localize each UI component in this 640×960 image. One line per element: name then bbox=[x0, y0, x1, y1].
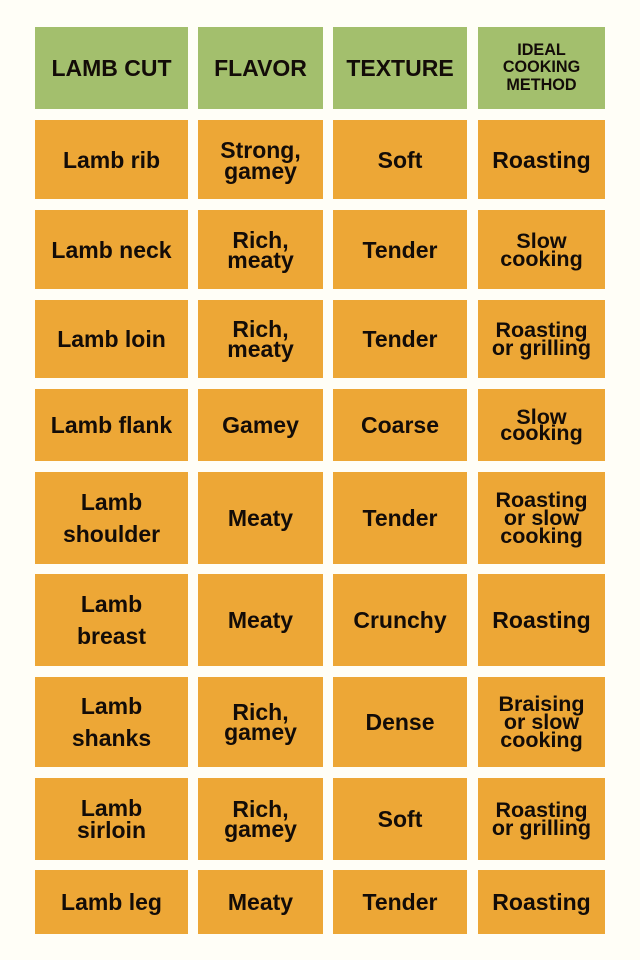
lamb shanks flavor bbox=[198, 677, 323, 767]
lamb neck flavor bbox=[198, 210, 323, 289]
lamb neck texture bbox=[333, 210, 467, 289]
row: lamb flank cut bbox=[35, 389, 188, 461]
header: lamb cut: LAMB CUT bbox=[51, 55, 172, 81]
header: ideal cooking method: COOKING bbox=[503, 58, 580, 76]
row: lamb sirloin cut: Lamb bbox=[81, 795, 142, 821]
lamb sirloin flavor: gamey bbox=[224, 816, 297, 842]
lamb loin cooking method: Roasting bbox=[496, 318, 587, 342]
lamb neck texture: Tender bbox=[362, 237, 437, 263]
lamb shoulder cooking method: or slow bbox=[504, 506, 579, 530]
lamb rib flavor bbox=[198, 120, 323, 199]
row: lamb shanks cut: Lamb bbox=[81, 693, 142, 719]
lamb rib cooking method bbox=[478, 120, 605, 199]
row: lamb shoulder cut: shoulder bbox=[63, 521, 160, 547]
header: lamb cut bbox=[35, 27, 188, 109]
lamb neck flavor: meaty bbox=[227, 247, 294, 273]
lamb shoulder cooking method bbox=[478, 472, 605, 564]
row: lamb rib cut bbox=[35, 120, 188, 199]
lamb sirloin cooking method bbox=[478, 778, 605, 860]
lamb leg flavor bbox=[198, 870, 323, 934]
lamb breast texture bbox=[333, 574, 467, 666]
lamb sirloin cooking method: or grilling bbox=[492, 816, 591, 840]
lamb shanks cooking method: or slow bbox=[504, 710, 579, 734]
lamb sirloin cooking method: Roasting bbox=[496, 798, 587, 822]
lamb shoulder flavor bbox=[198, 472, 323, 564]
row: lamb breast cut: Lamb bbox=[81, 591, 142, 617]
lamb neck cooking method: Slow bbox=[516, 229, 567, 253]
lamb rib cooking method: Roasting bbox=[492, 147, 591, 173]
row: lamb shanks cut: shanks bbox=[72, 725, 151, 751]
lamb loin texture bbox=[333, 300, 467, 378]
lamb shanks texture bbox=[333, 677, 467, 767]
lamb shoulder cooking method: cooking bbox=[500, 524, 583, 548]
row: lamb sirloin cut: sirloin bbox=[77, 817, 146, 843]
lamb rib texture bbox=[333, 120, 467, 199]
row: lamb leg cut bbox=[35, 870, 188, 934]
lamb breast cooking method bbox=[478, 574, 605, 666]
lamb neck cooking method bbox=[478, 210, 605, 289]
lamb flank cooking method: cooking bbox=[500, 421, 583, 445]
lamb breast texture: Crunchy bbox=[353, 607, 447, 633]
row: lamb leg cut: Lamb leg bbox=[61, 889, 162, 915]
lamb shanks cooking method bbox=[478, 677, 605, 767]
lamb leg flavor: Meaty bbox=[228, 889, 293, 915]
row: lamb rib cut: Lamb rib bbox=[63, 147, 160, 173]
lamb loin flavor: meaty bbox=[227, 336, 294, 362]
lamb leg texture: Tender bbox=[362, 889, 437, 915]
lamb flank cooking method bbox=[478, 389, 605, 461]
lamb flank flavor bbox=[198, 389, 323, 461]
header: ideal cooking method: METHOD bbox=[506, 76, 577, 94]
row: lamb breast cut bbox=[35, 574, 188, 666]
header: ideal cooking method bbox=[478, 27, 605, 109]
header: ideal cooking method: IDEAL bbox=[517, 41, 566, 59]
lamb flank texture: Coarse bbox=[361, 412, 439, 438]
lamb rib flavor: Strong, bbox=[220, 137, 301, 163]
lamb breast cooking method: Roasting bbox=[492, 607, 591, 633]
lamb sirloin flavor: Rich, bbox=[232, 796, 289, 822]
row: lamb shanks cut bbox=[35, 677, 188, 767]
header: texture bbox=[333, 27, 467, 109]
row: lamb shoulder cut: Lamb bbox=[81, 489, 142, 515]
row: lamb loin cut bbox=[35, 300, 188, 378]
lamb breast flavor: Meaty bbox=[228, 607, 293, 633]
row: lamb sirloin cut bbox=[35, 778, 188, 860]
lamb loin cooking method bbox=[478, 300, 605, 378]
lamb loin texture: Tender bbox=[362, 326, 437, 352]
lamb sirloin texture bbox=[333, 778, 467, 860]
lamb sirloin flavor bbox=[198, 778, 323, 860]
lamb shanks cooking method: cooking bbox=[500, 728, 583, 752]
lamb breast flavor bbox=[198, 574, 323, 666]
lamb flank texture bbox=[333, 389, 467, 461]
lamb rib flavor: gamey bbox=[224, 158, 297, 184]
lamb shoulder texture bbox=[333, 472, 467, 564]
row: lamb neck cut: Lamb neck bbox=[51, 237, 172, 263]
lamb leg cooking method: Roasting bbox=[492, 889, 591, 915]
lamb loin flavor: Rich, bbox=[232, 316, 289, 342]
lamb loin flavor bbox=[198, 300, 323, 378]
lamb neck flavor: Rich, bbox=[232, 226, 289, 252]
lamb sirloin texture: Soft bbox=[378, 806, 422, 832]
row: lamb shoulder cut bbox=[35, 472, 188, 564]
row: lamb loin cut: Lamb loin bbox=[57, 326, 166, 352]
lamb shoulder flavor: Meaty bbox=[228, 505, 293, 531]
lamb shoulder cooking method: Roasting bbox=[496, 488, 587, 512]
header: flavor: FLAVOR bbox=[214, 55, 307, 81]
row: lamb neck cut bbox=[35, 210, 188, 289]
header: texture: TEXTURE bbox=[346, 55, 454, 81]
lamb flank cooking method: Slow bbox=[516, 405, 567, 429]
lamb leg texture bbox=[333, 870, 467, 934]
lamb shoulder texture: Tender bbox=[362, 505, 437, 531]
row: lamb flank cut: Lamb flank bbox=[51, 412, 172, 438]
lamb loin cooking method: or grilling bbox=[492, 336, 591, 360]
lamb shanks cooking method: Braising bbox=[498, 692, 585, 716]
lamb rib texture: Soft bbox=[378, 147, 422, 173]
lamb leg cooking method bbox=[478, 870, 605, 934]
row: lamb breast cut: breast bbox=[77, 623, 146, 649]
lamb shanks flavor: gamey bbox=[224, 719, 297, 745]
lamb flank flavor: Gamey bbox=[222, 412, 299, 438]
lamb shanks flavor: Rich, bbox=[232, 698, 289, 724]
header: flavor bbox=[198, 27, 323, 109]
lamb neck cooking method: cooking bbox=[500, 247, 583, 271]
lamb shanks texture: Dense bbox=[365, 709, 435, 735]
